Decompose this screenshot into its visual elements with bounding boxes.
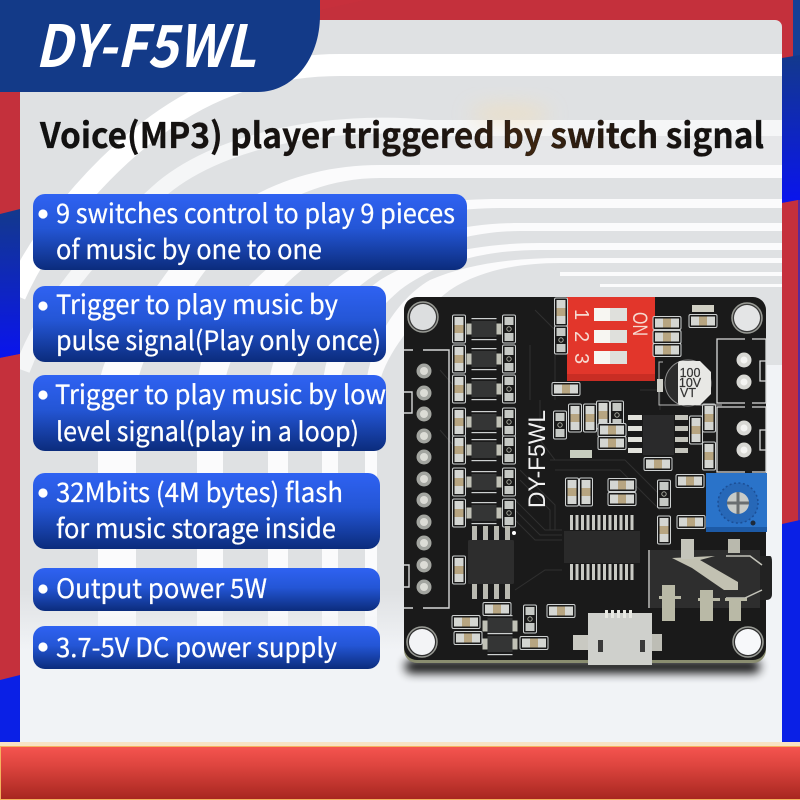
feature 4: [33, 471, 380, 549]
bottom red bar: [0, 742, 800, 800]
small SMD near DIP: [452, 298, 717, 655]
electrolytic capacitor: 10V: [679, 376, 702, 390]
left red lower: [0, 354, 20, 680]
mounting holes: [407, 302, 763, 657]
DIP switch: 2: [570, 331, 592, 342]
switch input channels: [452, 315, 516, 527]
feature 4: 32Mbits (4M bytes) flash: [56, 471, 343, 510]
title: model name: DY-F5WL: [35, 0, 256, 84]
feature 3: level signal(play in a loop): [56, 410, 359, 449]
feature 3: Trigger to play music by low: [55, 373, 386, 412]
feature 2: [33, 283, 386, 362]
left blue lower: [0, 675, 20, 742]
terminal holes: [736, 352, 752, 458]
flash memory chip: [468, 526, 516, 599]
right red strip: [782, 200, 798, 524]
feature 5: [33, 567, 380, 611]
heading: Voice(MP3) player triggered by switch signal: [39, 108, 764, 159]
feature 2: pulse signal(Play only once): [56, 319, 381, 358]
feature 6: 3.7-5V DC power supply: [56, 626, 337, 665]
audio jack: [649, 539, 772, 621]
DIP switch: 3: [570, 353, 592, 364]
right blue strip lower: [782, 520, 800, 742]
small IC: [628, 415, 688, 455]
pcb traces: [440, 310, 665, 590]
feature 1: 9 switches control to play 9 pieces: [56, 192, 455, 231]
board shadow: [405, 660, 760, 673]
glow behind title: [470, 105, 550, 123]
left red upper: [0, 92, 20, 214]
main audio chip: [564, 515, 640, 580]
electrolytic capacitor: [657, 360, 722, 406]
left blue strip: [0, 209, 20, 358]
feature 3: [33, 373, 386, 451]
terminal blocks: [717, 339, 766, 472]
feature 1: of music by one to one: [56, 228, 322, 267]
circuit board photo: [404, 297, 772, 673]
DIP switch: [567, 297, 655, 381]
feature 4: for music storage inside: [56, 507, 336, 546]
header pin row: [404, 350, 449, 608]
header tab: [0, 0, 320, 92]
DIP switch: ON: [628, 312, 651, 336]
electrolytic capacitor: VT: [680, 386, 696, 400]
right blue strip upper: [793, 0, 800, 57]
top red strip: [320, 0, 793, 58]
blue potentiometer: [706, 473, 767, 532]
micro USB connector: [573, 610, 662, 665]
feature 2: Trigger to play music by: [56, 283, 338, 322]
board label: DY-F5WL: [524, 410, 551, 508]
electrolytic capacitor: 100: [680, 366, 700, 380]
DIP switch: 1: [570, 309, 592, 320]
feature 5: Output power 5W: [56, 567, 267, 606]
feature 1: [33, 192, 467, 270]
